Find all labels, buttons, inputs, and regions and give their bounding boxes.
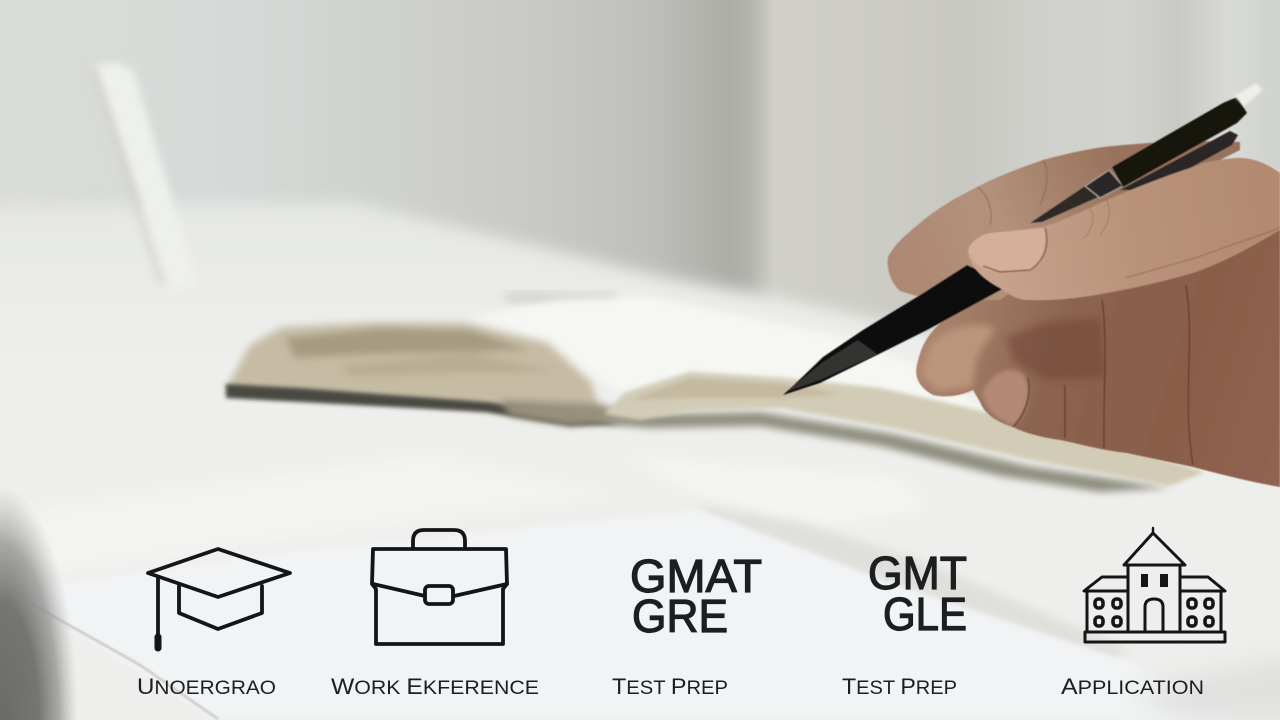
knuckle crease on index finger: [977, 160, 1047, 225]
back of hand and lower fingers: [916, 225, 1280, 487]
paper edge line: [28, 602, 218, 719]
pen upper barrel: [1112, 97, 1247, 187]
pen metal section: [1030, 170, 1123, 223]
pen lower barrel and nib: [783, 265, 1010, 395]
little finger tip: [982, 370, 1028, 426]
text: GMAT GRE first: GRE: [632, 590, 728, 642]
index finger: [888, 141, 1240, 300]
text: GMAT GRE first: GMAT: [630, 550, 762, 602]
pen clip: [1120, 131, 1238, 190]
shadow above paper edge: [700, 505, 1130, 660]
label: Work Experience: WORK EKFERENCE: [331, 674, 539, 699]
wall and curtain backdrop: [0, 0, 1280, 340]
white right page of book: [470, 297, 1000, 420]
dark blurred foreground corner: [0, 480, 80, 720]
ring finger highlight: [920, 325, 994, 392]
desk surface: [0, 202, 1280, 720]
label: Test Prep second: TEST PREP: [842, 674, 957, 699]
thumb: [968, 158, 1280, 300]
thumbnail: [969, 228, 1045, 271]
text: GMT GLE second: GMT: [868, 547, 967, 599]
soft sheets on the desk: [20, 452, 930, 580]
palm dark folds: [1005, 318, 1105, 380]
lamp stand at left: [95, 62, 198, 290]
label: Test Prep first: TEST PREP: [612, 674, 728, 699]
text: GMAT GRE first: [630, 550, 762, 642]
right book dark edge: [590, 412, 1170, 492]
right pages of book: [604, 372, 1205, 486]
icon: graduation cap: [148, 549, 290, 648]
left book dark edge: [226, 384, 620, 426]
palm crease lines: [1013, 285, 1193, 465]
label: Application: APPLICATION: [1061, 674, 1204, 699]
pen band highlight: [1085, 170, 1123, 198]
lower-right shade: [1130, 650, 1280, 720]
text: GMT GLE second: GLE: [883, 588, 967, 640]
icon: university building: [1084, 528, 1225, 642]
nib sheen: [786, 340, 877, 392]
thumb underside crease: [1125, 228, 1280, 278]
foreground white paper: [28, 510, 1240, 720]
spine shadow: [500, 400, 650, 426]
lamp shade: [90, 68, 165, 285]
left pages of book: [226, 322, 600, 420]
thumbnail edge: [983, 228, 1047, 272]
pen white cap: [1234, 83, 1263, 106]
thumb knuckle wrinkles: [1084, 200, 1109, 238]
label: Undergrad: UNOERGRAO: [137, 674, 276, 699]
icon: briefcase: [372, 530, 507, 644]
faint object behind the book: [500, 293, 620, 305]
text: GMT GLE second: [868, 547, 967, 640]
photo: hand holding a pen: [783, 83, 1280, 487]
